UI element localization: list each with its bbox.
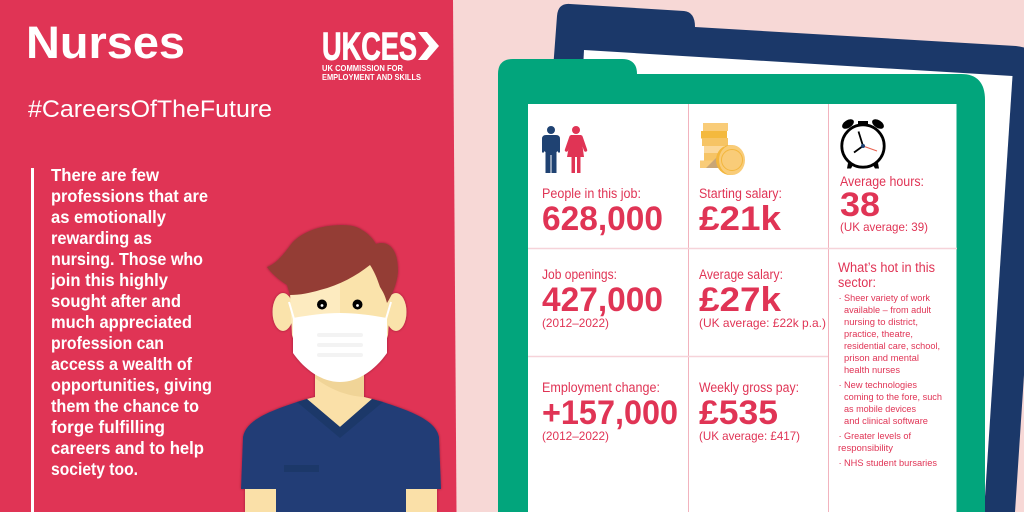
text block: what's hot in this sector: responsibility <box>838 443 893 454</box>
text block: intro paragraph <box>50 165 212 479</box>
stat: employment change: +157,000 <box>542 394 678 432</box>
text block: intro paragraph: rewarding as <box>51 228 152 248</box>
stat: people in this job: People in this job: <box>542 186 641 201</box>
scrubs top <box>241 399 441 512</box>
text block: what's hot in this sector: and clinical software <box>844 416 928 427</box>
scrubs pocket <box>284 465 319 472</box>
text block: intro paragraph: careers and to help <box>51 438 204 458</box>
text block: intro paragraph: much appreciated <box>51 312 192 332</box>
stat: job openings: 427,000 <box>542 281 663 319</box>
text block: what's hot in this sector: health nurses <box>844 365 900 376</box>
left eye <box>317 300 327 310</box>
text block: intro paragraph: join this highly <box>50 270 168 290</box>
panel: red left panel <box>0 0 456 512</box>
mask straps <box>289 302 391 319</box>
text block: intro paragraph: There are few <box>51 165 160 185</box>
panel: white stats sheet <box>528 104 957 512</box>
stat: employment change <box>542 380 678 443</box>
stat: employment change: Employment change: <box>542 380 660 395</box>
text block: what's hot in this sector: · <box>838 293 842 304</box>
text block: what's hot in this sector: prison and mental <box>844 353 919 364</box>
text block: what's hot in this sector: Sheer variety of work <box>844 293 930 304</box>
neck <box>307 370 372 430</box>
icon: man and woman <box>542 126 586 173</box>
stat: average salary: Average salary: <box>699 267 783 282</box>
stat: weekly gross pay: Weekly gross pay: <box>699 380 799 395</box>
text block: intro paragraph: professions that are <box>51 186 208 206</box>
text block: what's hot in this sector: residential care, school, <box>844 341 940 352</box>
text block: what's hot in this sector: sector: <box>838 275 876 290</box>
text block: what's hot in this sector: available – from adult <box>844 305 931 316</box>
logo: UKCES: UKCES <box>322 26 417 68</box>
stat: starting salary: £21k <box>699 200 781 238</box>
stat: weekly gross pay <box>699 380 800 443</box>
text block: what's hot in this sector: Greater levels of <box>844 431 911 442</box>
logo: UKCES: EMPLOYMENT AND SKILLS <box>322 72 421 82</box>
text block: what's hot in this sector: · <box>838 431 842 442</box>
stat: people in this job: 628,000 <box>542 200 663 238</box>
icon: alarm clock <box>840 117 886 168</box>
text block: what's hot in this sector <box>838 260 942 469</box>
text block: what's hot in this sector: coming to the fore, such <box>844 392 942 403</box>
stat: starting salary <box>699 186 782 238</box>
hashtag heading: #CareersOfTheFuture <box>28 96 272 123</box>
decorative bar beside paragraph <box>31 168 34 512</box>
text block: intro paragraph: nursing. Those who <box>51 249 203 269</box>
face <box>289 270 340 360</box>
stat: job openings: Job openings: <box>542 267 617 282</box>
right eye <box>352 300 362 310</box>
hair <box>267 225 398 303</box>
text block: intro paragraph: opportunities, giving <box>51 375 212 395</box>
text block: what's hot in this sector: practice, theatre, <box>844 329 913 340</box>
stat: average salary <box>699 267 826 330</box>
folder: green front folder <box>498 59 985 512</box>
logo: UKCES: UK COMMISSION FOR <box>322 63 403 73</box>
stat: job openings: (2012–2022) <box>542 316 609 330</box>
arms <box>245 488 437 512</box>
stat: average hours: 38 <box>840 186 880 224</box>
icon: coins <box>700 123 745 175</box>
text block: intro paragraph: society too. <box>51 459 138 479</box>
folder: navy back folder <box>520 4 1024 512</box>
stat: job openings <box>542 267 663 330</box>
stat: average hours: Average hours: <box>840 174 924 189</box>
text block: intro paragraph: as emotionally <box>51 207 166 227</box>
text block: intro paragraph: them the chance to <box>51 396 199 416</box>
text block: intro paragraph: profession can <box>51 333 164 353</box>
scrubs collar <box>297 399 383 438</box>
stat: average hours <box>840 174 928 234</box>
text block: what's hot in this sector: as mobile devices <box>844 404 916 415</box>
text block: what's hot in this sector: NHS student bursaries <box>844 458 937 469</box>
stat: starting salary: Starting salary: <box>699 186 782 201</box>
neck shadow <box>315 375 364 397</box>
illustration: nurse <box>241 225 441 512</box>
text block: what's hot in this sector: nursing to district, <box>844 317 918 328</box>
stat: weekly gross pay: (UK average: £417) <box>699 429 800 443</box>
text block: intro paragraph: forge fulfilling <box>51 417 165 437</box>
text block: intro paragraph: sought after and <box>51 291 181 311</box>
mask pleats <box>319 335 361 355</box>
stat: average salary: (UK average: £22k p.a.) <box>699 316 826 330</box>
text block: what's hot in this sector: · <box>838 380 842 391</box>
title: Nurses <box>26 17 185 68</box>
paper sheet behind folder <box>560 50 1012 512</box>
stat: average hours: (UK average: 39) <box>840 220 928 234</box>
text block: what's hot in this sector: New technologies <box>844 380 917 391</box>
stat: employment change: (2012–2022) <box>542 429 609 443</box>
text block: what's hot in this sector: What’s hot in this <box>838 260 935 275</box>
face mask <box>293 313 387 382</box>
text block: what's hot in this sector: · <box>838 458 842 469</box>
stat: weekly gross pay: £535 <box>699 394 778 432</box>
left ear <box>272 293 294 331</box>
stat: average salary: £27k <box>699 281 781 319</box>
text block: intro paragraph: access a wealth of <box>51 354 192 374</box>
right ear <box>386 293 406 331</box>
logo: UKCES <box>322 26 439 82</box>
